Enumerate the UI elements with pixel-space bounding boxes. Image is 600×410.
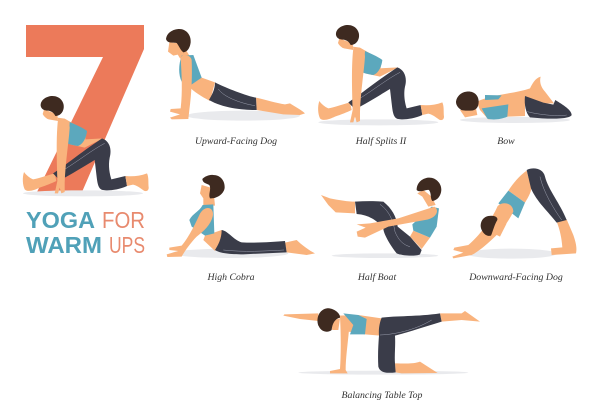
- figure: hero kneeling pose: [23, 96, 149, 196]
- caption: downward-facing dog: Downward-Facing Dog: [468, 272, 563, 283]
- figure: bow: [456, 77, 572, 123]
- figure: balancing table top: [283, 308, 480, 375]
- figure: high cobra: [167, 175, 315, 258]
- title: yoga for warm ups: [26, 207, 145, 258]
- figure: half splits II: [318, 25, 444, 125]
- figure: half boat: [321, 178, 441, 258]
- caption: high cobra: High Cobra: [206, 272, 255, 283]
- title: yoga for warm ups: FOR: [102, 207, 145, 233]
- caption: half splits II: Half Splits II: [355, 136, 407, 147]
- figure: downward-facing dog: [452, 168, 576, 259]
- caption: bow: Bow: [497, 136, 515, 147]
- caption: balancing table top: Balancing Table Top: [342, 390, 423, 401]
- big number seven: [26, 25, 144, 192]
- caption: upward-facing dog: Upward-Facing Dog: [195, 136, 277, 147]
- title: yoga for warm ups: YOGA: [26, 207, 95, 233]
- title: yoga for warm ups: UPS: [109, 232, 145, 258]
- title: yoga for warm ups: WARM: [26, 232, 102, 258]
- figure: upward-facing dog: [166, 29, 305, 121]
- caption: half boat: Half Boat: [357, 272, 396, 283]
